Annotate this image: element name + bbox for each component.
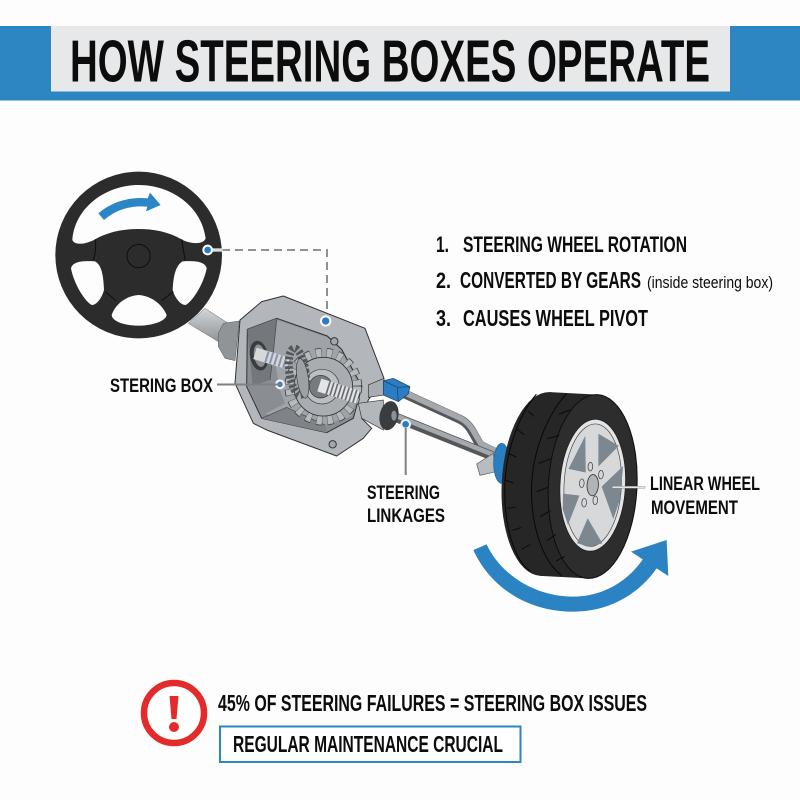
step 1 [436, 232, 687, 257]
header banner [0, 26, 800, 100]
callout: maintenance [220, 726, 520, 762]
road wheel [473, 390, 668, 612]
marker: linkages [400, 419, 411, 430]
label: steering linkages [367, 482, 445, 527]
lower linkage rod [390, 415, 498, 458]
arrow: wheel rotation [98, 193, 161, 220]
icon: steering wheel [55, 172, 223, 338]
step 3 [436, 305, 648, 331]
bracket [477, 453, 496, 475]
callout: maintenance: REGULAR MAINTENANCE CRUCIAL [233, 731, 503, 757]
marker: housing [320, 315, 331, 327]
step 3: CAUSES WHEEL PIVOT [463, 305, 648, 331]
label: linear wheel movement: LINEAR WHEEL [650, 473, 760, 495]
input port [248, 339, 270, 372]
housing [235, 296, 384, 456]
icon: warning [144, 683, 204, 743]
step 2: CONVERTED BY GEARS [460, 267, 641, 293]
leader: wheel label [612, 486, 645, 488]
lever mount [368, 378, 384, 397]
label: linear wheel movement: MOVEMENT [651, 497, 738, 519]
upper linkage rod [403, 393, 497, 453]
blue connector [383, 378, 410, 402]
label: steering linkages: LINKAGES [367, 505, 445, 527]
label: steering linkages: STEERING [367, 482, 440, 504]
step 1: 1. [436, 232, 449, 257]
marker: wheel [202, 245, 223, 255]
step 3: 3. [436, 305, 451, 331]
label: linear wheel movement [650, 473, 760, 519]
leader: linkages label [405, 428, 407, 475]
worm shaft [255, 353, 290, 364]
marker: steering box [275, 379, 285, 389]
leader: steering box label [217, 384, 281, 386]
step 2: (inside steering box) [647, 273, 773, 292]
step 2: 2. [436, 268, 451, 293]
bolts [331, 338, 338, 345]
steering box assembly [235, 296, 498, 458]
arrow: wheel movement [473, 540, 668, 612]
gears [286, 347, 358, 420]
step 1: STEERING WHEEL ROTATION [463, 232, 687, 257]
tyre [497, 390, 642, 581]
alloy rim [557, 418, 629, 553]
steps list [436, 232, 773, 331]
steering column shaft [188, 308, 239, 361]
blue hub [494, 443, 510, 483]
leader: wheel to steering box [222, 250, 327, 315]
label: steering box: STERING BOX [110, 376, 213, 397]
